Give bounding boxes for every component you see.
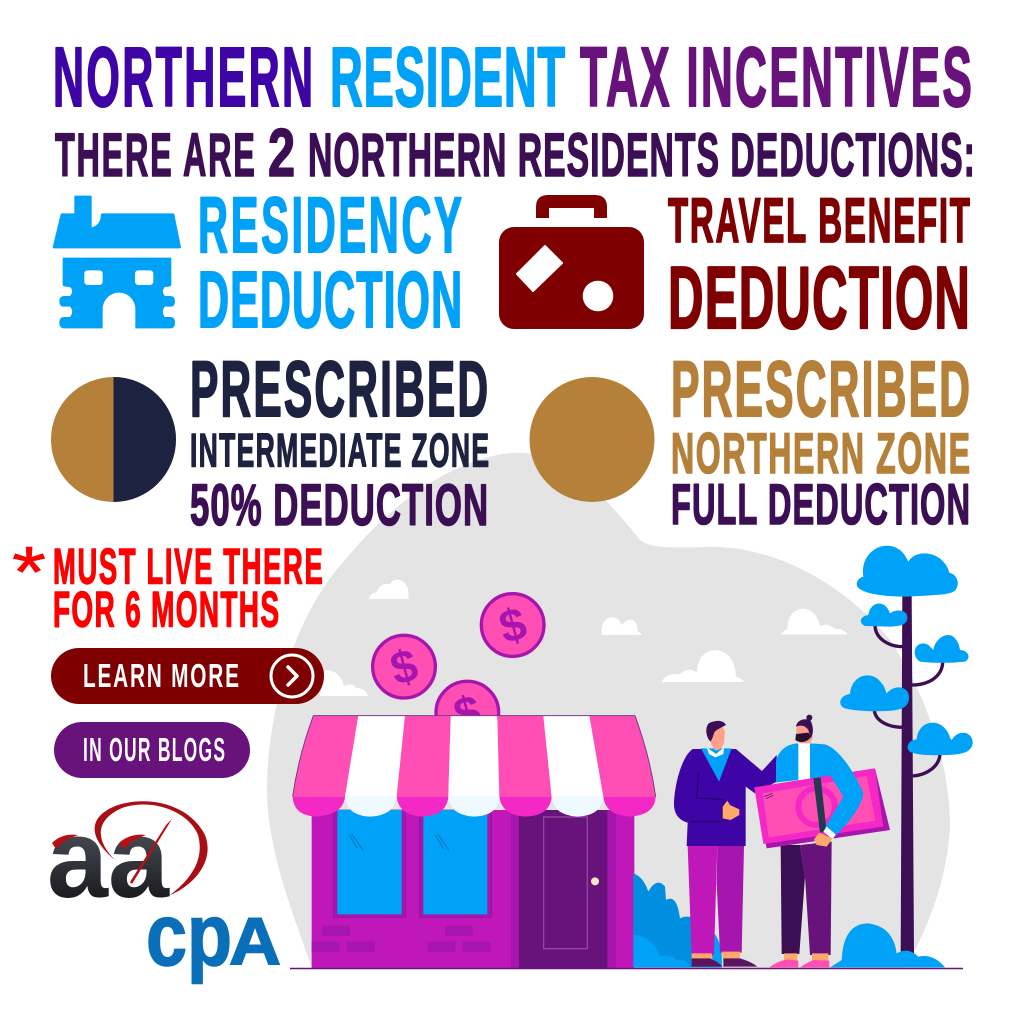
callout: must live there: FOR 6 MONTHS	[53, 582, 279, 637]
block: intermediate zone: PRESCRIBED	[190, 346, 488, 433]
coin: $	[494, 597, 532, 653]
subtitle: THERE ARE	[55, 121, 255, 190]
shoes	[692, 958, 757, 967]
block: northern zone	[671, 346, 970, 536]
block: intermediate zone: 50% DEDUCTION	[190, 473, 488, 539]
background blob	[267, 453, 950, 968]
coin: $	[448, 684, 486, 741]
ground line	[290, 968, 963, 970]
bush	[633, 873, 722, 967]
button: in our blogs	[54, 722, 250, 778]
coin	[373, 635, 435, 698]
button: learn more: LEARN MORE	[83, 657, 239, 694]
icon: suitcase	[499, 195, 644, 329]
coin	[481, 594, 544, 656]
cloud behind button	[320, 670, 368, 696]
block: northern zone: FULL DEDUCTION	[671, 473, 970, 536]
ankles	[692, 952, 740, 960]
neck	[701, 748, 732, 782]
trousers	[688, 846, 717, 955]
heading: travel benefit deduction: TRAVEL BENEFIT	[668, 186, 970, 256]
coin: $	[385, 638, 423, 695]
heading: residency deduction	[198, 182, 462, 344]
ankles	[784, 953, 828, 962]
subtitle	[55, 117, 975, 191]
bush	[830, 923, 945, 967]
window	[419, 810, 492, 917]
cloud	[662, 650, 744, 682]
icon: house	[54, 197, 180, 328]
cloud	[369, 580, 408, 599]
icon: full circle	[530, 377, 654, 502]
logo: aa cpa: A	[229, 904, 281, 980]
building	[312, 810, 634, 968]
subtitle: 2	[268, 117, 295, 191]
subtitle: NORTHERN RESIDENTS DEDUCTIONS:	[308, 120, 975, 190]
title: TAX INCENTIVES	[580, 31, 972, 125]
coin	[436, 681, 499, 744]
money box	[754, 768, 890, 848]
sweater	[776, 743, 798, 782]
awning	[293, 716, 656, 817]
man with sweater	[674, 721, 777, 967]
callout: must live there	[12, 533, 323, 637]
title	[53, 30, 972, 125]
beard	[795, 733, 811, 742]
shoes	[769, 959, 829, 967]
window	[333, 810, 406, 917]
icon: half circle	[51, 377, 176, 502]
trousers	[781, 845, 805, 954]
heading: residency deduction: DEDUCTION	[198, 255, 462, 344]
logo: aa cpa	[47, 796, 281, 984]
hand	[723, 801, 739, 820]
title: RESIDENT	[330, 31, 565, 125]
illustration: store with coins	[293, 580, 656, 968]
arm	[817, 744, 863, 836]
hand	[814, 833, 833, 847]
cloud	[781, 609, 848, 634]
block: intermediate zone: INTERMEDIATE ZONE	[190, 424, 489, 477]
cloud	[602, 617, 642, 635]
button: in our blogs: IN OUR BLOGS	[83, 731, 225, 769]
illustration: people, tree and bushes	[633, 546, 973, 967]
bricks	[312, 926, 491, 952]
block: northern zone: NORTHERN ZONE	[671, 421, 970, 486]
button: learn more	[51, 648, 324, 704]
shirt	[798, 743, 811, 780]
door	[511, 810, 616, 968]
cuff	[823, 827, 836, 839]
heading: travel benefit deduction: DEDUCTION	[668, 249, 970, 348]
heading: residency deduction: RESIDENCY	[198, 182, 462, 269]
heading: travel benefit deduction	[668, 186, 970, 348]
logo: aa cpa: cp	[146, 885, 232, 984]
logo: aa cpa: aa	[47, 796, 170, 921]
man with beard	[754, 715, 890, 967]
title: NORTHERN	[53, 30, 313, 125]
tree	[840, 546, 973, 955]
sweater	[674, 749, 777, 846]
block: intermediate zone	[190, 346, 489, 539]
block: northern zone: PRESCRIBED	[671, 346, 970, 433]
callout: must live there: MUST LIVE THERE	[53, 537, 323, 595]
head	[796, 725, 813, 743]
strap	[813, 777, 827, 833]
callout: must live there: *	[12, 533, 46, 613]
